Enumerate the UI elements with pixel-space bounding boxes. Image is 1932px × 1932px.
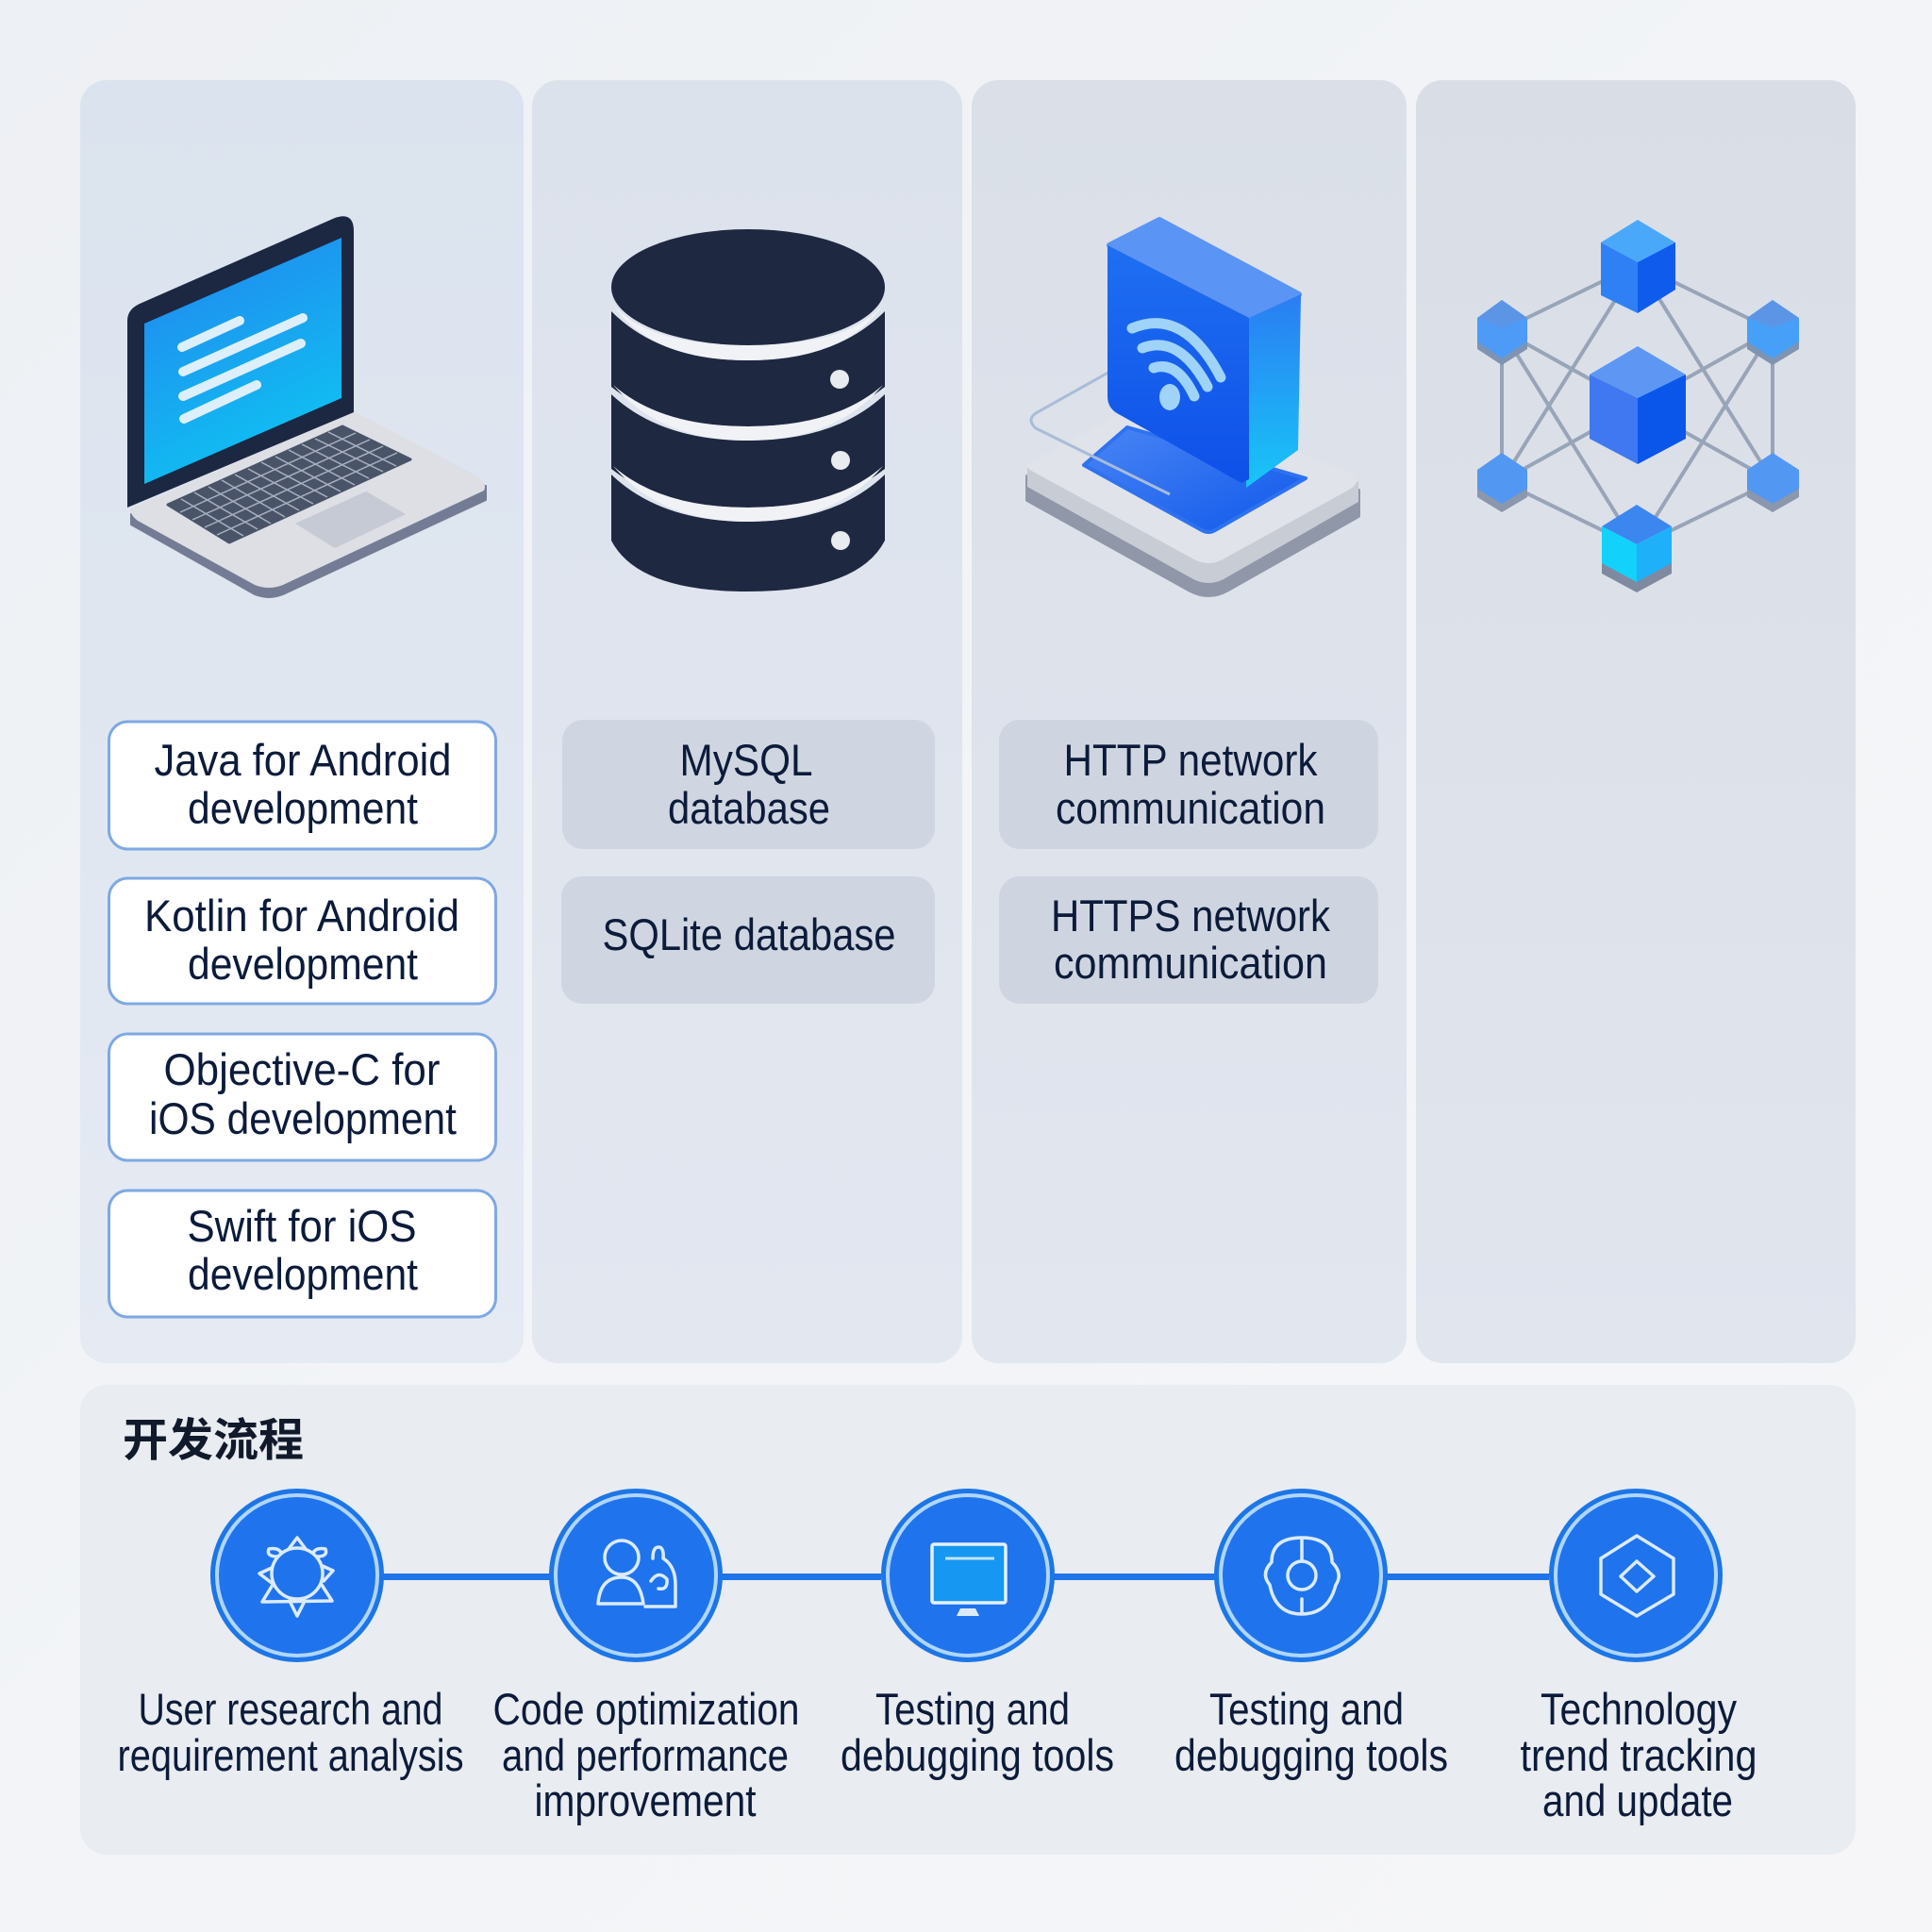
card: HTTP: communication xyxy=(1056,783,1325,833)
card: MySQL: MySQL xyxy=(679,735,813,785)
card: SQLite xyxy=(561,876,935,1004)
panel: network xyxy=(972,80,1407,1363)
label: and performance xyxy=(502,1730,789,1780)
card: Java: Java for Android xyxy=(155,735,451,785)
step 5 xyxy=(1521,1491,1757,1825)
center cube xyxy=(1590,346,1686,464)
card: HTTP: HTTP network xyxy=(1064,735,1318,785)
card: SQLite: SQLite database xyxy=(602,909,896,959)
label: debugging tools xyxy=(1174,1730,1448,1780)
label xyxy=(1174,1684,1448,1780)
label: requirement analysis xyxy=(117,1730,464,1780)
label: Technology xyxy=(1541,1684,1737,1734)
icon: hexagon xyxy=(1601,1536,1674,1616)
card: HTTPS: communication xyxy=(1054,938,1327,988)
label xyxy=(1521,1684,1757,1825)
label: Testing and xyxy=(875,1684,1070,1734)
label: and update xyxy=(1542,1775,1733,1825)
small node top left xyxy=(1477,300,1527,365)
card: Java: development xyxy=(188,783,418,833)
card: Objective-C: iOS development xyxy=(149,1093,457,1143)
panel: databases xyxy=(532,80,962,1363)
icon: laptop xyxy=(127,216,486,597)
connector lines xyxy=(382,1574,1549,1580)
card: MySQL xyxy=(562,720,935,849)
icon: wifi router xyxy=(1027,220,1358,595)
label: debugging tools xyxy=(841,1730,1114,1780)
card: Kotlin: development xyxy=(188,939,418,989)
panel: languages xyxy=(80,80,524,1363)
card: HTTPS xyxy=(999,876,1378,1004)
card: MySQL: database xyxy=(668,783,830,833)
label: Code optimization xyxy=(492,1684,800,1734)
card: Kotlin xyxy=(109,878,496,1004)
panel: architecture network xyxy=(1416,80,1856,1363)
card: Objective-C: Objective-C for xyxy=(164,1044,440,1094)
card: Swift: Swift for iOS xyxy=(187,1201,417,1251)
top cube xyxy=(1601,220,1675,313)
card: Swift: development xyxy=(188,1249,418,1299)
card: Kotlin: Kotlin for Android xyxy=(144,891,459,941)
icon: database xyxy=(611,229,885,591)
icon: target head xyxy=(1265,1538,1339,1614)
label: Testing and xyxy=(1209,1684,1404,1734)
label: trend tracking xyxy=(1521,1730,1757,1780)
card: Objective-C xyxy=(109,1034,496,1160)
icon: gear xyxy=(259,1538,333,1616)
card: HTTPS: HTTPS network xyxy=(1051,891,1330,941)
card: Swift xyxy=(109,1191,496,1317)
heading: 开发流程 xyxy=(123,1416,304,1466)
icon: person with scroll xyxy=(598,1541,675,1607)
step 4 xyxy=(1174,1491,1448,1780)
bottom cube xyxy=(1602,505,1672,592)
card: Java xyxy=(109,722,496,849)
card: HTTP xyxy=(999,720,1378,849)
label: User research and xyxy=(138,1684,443,1734)
label xyxy=(492,1684,800,1825)
panel: development process xyxy=(80,1385,1856,1855)
icon: node network xyxy=(1477,220,1799,592)
small node top right xyxy=(1747,300,1799,365)
step 1 xyxy=(117,1491,464,1780)
small node bottom right xyxy=(1747,453,1799,512)
label: improvement xyxy=(534,1775,757,1825)
step 2 xyxy=(492,1491,800,1825)
step 3 xyxy=(841,1491,1114,1780)
label xyxy=(117,1684,464,1780)
small node bottom left xyxy=(1477,453,1527,512)
icon: monitor xyxy=(932,1544,1006,1616)
label xyxy=(841,1684,1114,1780)
